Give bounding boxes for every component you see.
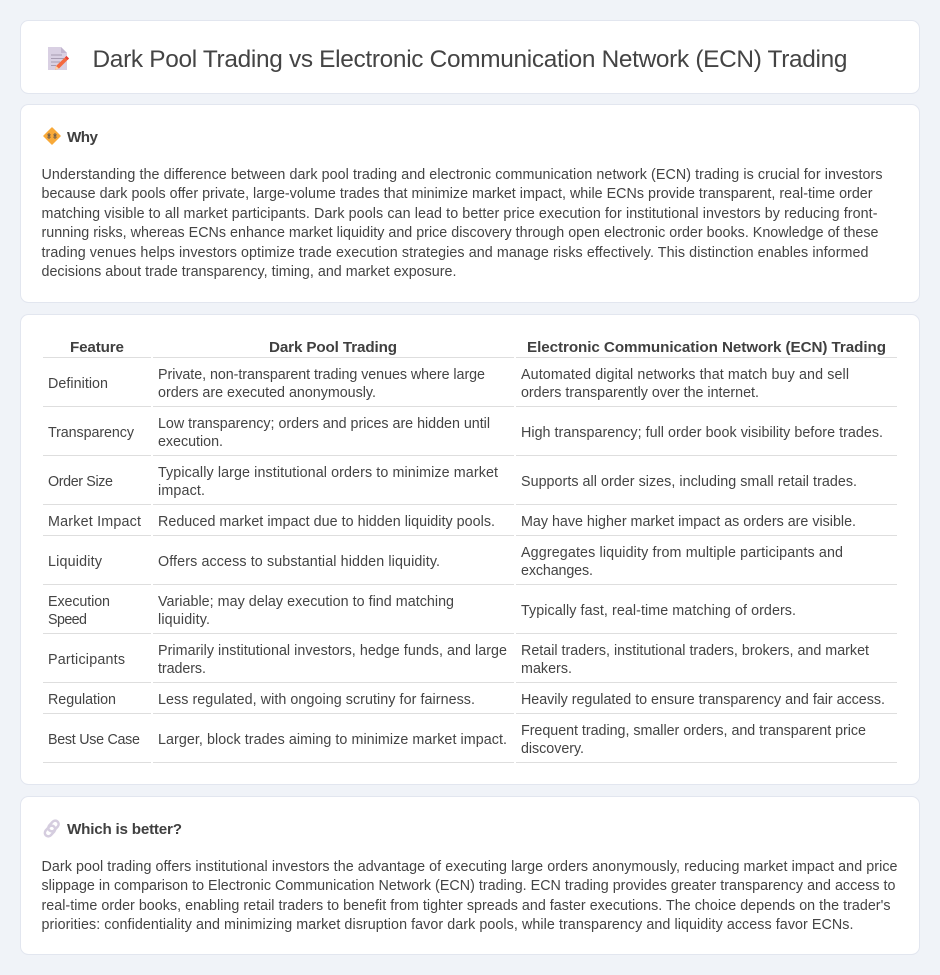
row: definition: Automated digital networks that match buy and sell bbox=[521, 367, 849, 383]
row: order size: Order Size bbox=[48, 474, 113, 490]
row: liquidity: Offers access to substantial hidden liquidity. bbox=[158, 554, 440, 570]
row: best use case: discovery. bbox=[521, 741, 584, 757]
table header row: Feature bbox=[70, 339, 124, 356]
row: definition: Definition bbox=[48, 376, 108, 392]
row: regulation bbox=[48, 692, 885, 708]
row: execution speed: Execution bbox=[48, 594, 110, 610]
panel: why bbox=[20, 104, 920, 302]
row: regulation: Regulation bbox=[48, 692, 116, 708]
row: execution speed: Speed bbox=[48, 612, 87, 628]
table header row: Dark Pool Trading bbox=[269, 339, 397, 356]
panel: which is better bbox=[20, 796, 920, 954]
text block: which is better paragraph: slippage in comparison to Electronic Communication Network (ECN) trading. ECN trading provides greater transparency and access to bbox=[42, 878, 896, 894]
row: transparency: Transparency bbox=[48, 425, 135, 441]
row: liquidity: Liquidity bbox=[48, 554, 103, 570]
table header row bbox=[70, 339, 886, 356]
row: market impact: May have higher market impact as orders are visible. bbox=[521, 514, 856, 530]
row: best use case: Frequent trading, smaller orders, and transparent price bbox=[521, 723, 866, 739]
row: transparency bbox=[48, 416, 883, 450]
heading: which is better: Which is better? bbox=[67, 821, 182, 838]
heading: why: Why bbox=[67, 129, 99, 146]
text block: which is better paragraph: real-time order books, enabling retail traders to benefit from tighter spreads and faster executions. The choice depends on the trader's bbox=[42, 898, 890, 914]
row: order size bbox=[48, 465, 857, 499]
row: participants: traders. bbox=[158, 661, 206, 677]
row: liquidity: Aggregates liquidity from multiple participants and bbox=[521, 545, 843, 561]
title: Dark Pool Trading vs Electronic Communication Network (ECN) Trading bbox=[92, 46, 848, 73]
row: regulation: Less regulated, with ongoing scrutiny for fairness. bbox=[158, 692, 475, 708]
text block: why paragraph: running risks, whereas ECNs enhance market liquidity and price discovery through open electronic order books. Knowledge of these bbox=[42, 225, 879, 241]
icon: orange diamond bbox=[44, 128, 60, 144]
row: market impact: Reduced market impact due to hidden liquidity pools. bbox=[158, 514, 495, 530]
row: participants: Retail traders, institutional traders, brokers, and market bbox=[521, 643, 869, 659]
row: liquidity: exchanges. bbox=[521, 563, 593, 579]
row: participants: makers. bbox=[521, 661, 572, 677]
row: order size: impact. bbox=[158, 483, 205, 499]
row: liquidity bbox=[48, 545, 843, 579]
row: order size: Supports all order sizes, including small retail trades. bbox=[521, 474, 857, 490]
row: market impact bbox=[48, 514, 856, 530]
row: execution speed: Variable; may delay execution to find matching bbox=[158, 594, 454, 610]
text block: which is better paragraph bbox=[42, 859, 898, 933]
text block: why paragraph: trading venues helps investors optimize trade execution strategies and manage risks effectively. This distinction enables informed bbox=[42, 245, 869, 261]
text block: which is better paragraph: priorities: confidentiality and minimizing market disruption favor dark pools, while transparency and liquidity access favor ECNs. bbox=[42, 917, 854, 933]
row: definition: Private, non-transparent trading venues where large bbox=[158, 367, 485, 383]
text block: why paragraph: decisions about trade transparency, timing, and market exposure. bbox=[42, 264, 456, 280]
row: best use case: Best Use Case bbox=[48, 732, 140, 748]
text block: which is better paragraph: Dark pool trading offers institutional investors the advantage of executing large orders anonymously, reducing market impact and price bbox=[42, 859, 898, 875]
table header row: Electronic Communication Network (ECN) Trading bbox=[527, 339, 886, 356]
row: execution speed bbox=[48, 594, 796, 628]
row: order size: Typically large institutional orders to minimize market bbox=[158, 465, 498, 481]
row: definition bbox=[48, 367, 849, 401]
panel: comparison table bbox=[20, 314, 920, 784]
text block: why paragraph: because dark pools offer private, large-volume trades that minimize market impact, while ECNs provide transparent, real-time order bbox=[42, 186, 873, 202]
row: definition: orders are executed anonymously. bbox=[158, 385, 376, 401]
row: transparency: execution. bbox=[158, 434, 223, 450]
row: transparency: High transparency; full order book visibility before trades. bbox=[521, 425, 883, 441]
row: participants: Primarily institutional investors, hedge funds, and large bbox=[158, 643, 507, 659]
row: best use case: Larger, block trades aiming to minimize market impact. bbox=[158, 732, 507, 748]
icon: memo with pencil bbox=[48, 47, 69, 70]
row: participants: Participants bbox=[48, 652, 125, 668]
text block: why paragraph: matching visible to all market participants. Dark pools can lead to better price execution for institutional investors by reducing front- bbox=[42, 206, 878, 222]
icon: chain link bbox=[43, 819, 60, 838]
row: market impact: Market Impact bbox=[48, 514, 141, 530]
row: regulation: Heavily regulated to ensure transparency and fair access. bbox=[521, 692, 885, 708]
row: execution speed: liquidity. bbox=[158, 612, 210, 628]
text block: why paragraph bbox=[42, 167, 882, 280]
row: definition: orders transparently over the internet. bbox=[521, 385, 759, 401]
panel: title header bbox=[20, 20, 920, 94]
row: transparency: Low transparency; orders and prices are hidden until bbox=[158, 416, 490, 432]
row: best use case bbox=[48, 723, 866, 757]
row: participants bbox=[48, 643, 869, 677]
text block: why paragraph: Understanding the difference between dark pool trading and electronic communication network (ECN) trading is crucial for investors bbox=[42, 167, 882, 183]
row: execution speed: Typically fast, real-time matching of orders. bbox=[521, 603, 796, 619]
